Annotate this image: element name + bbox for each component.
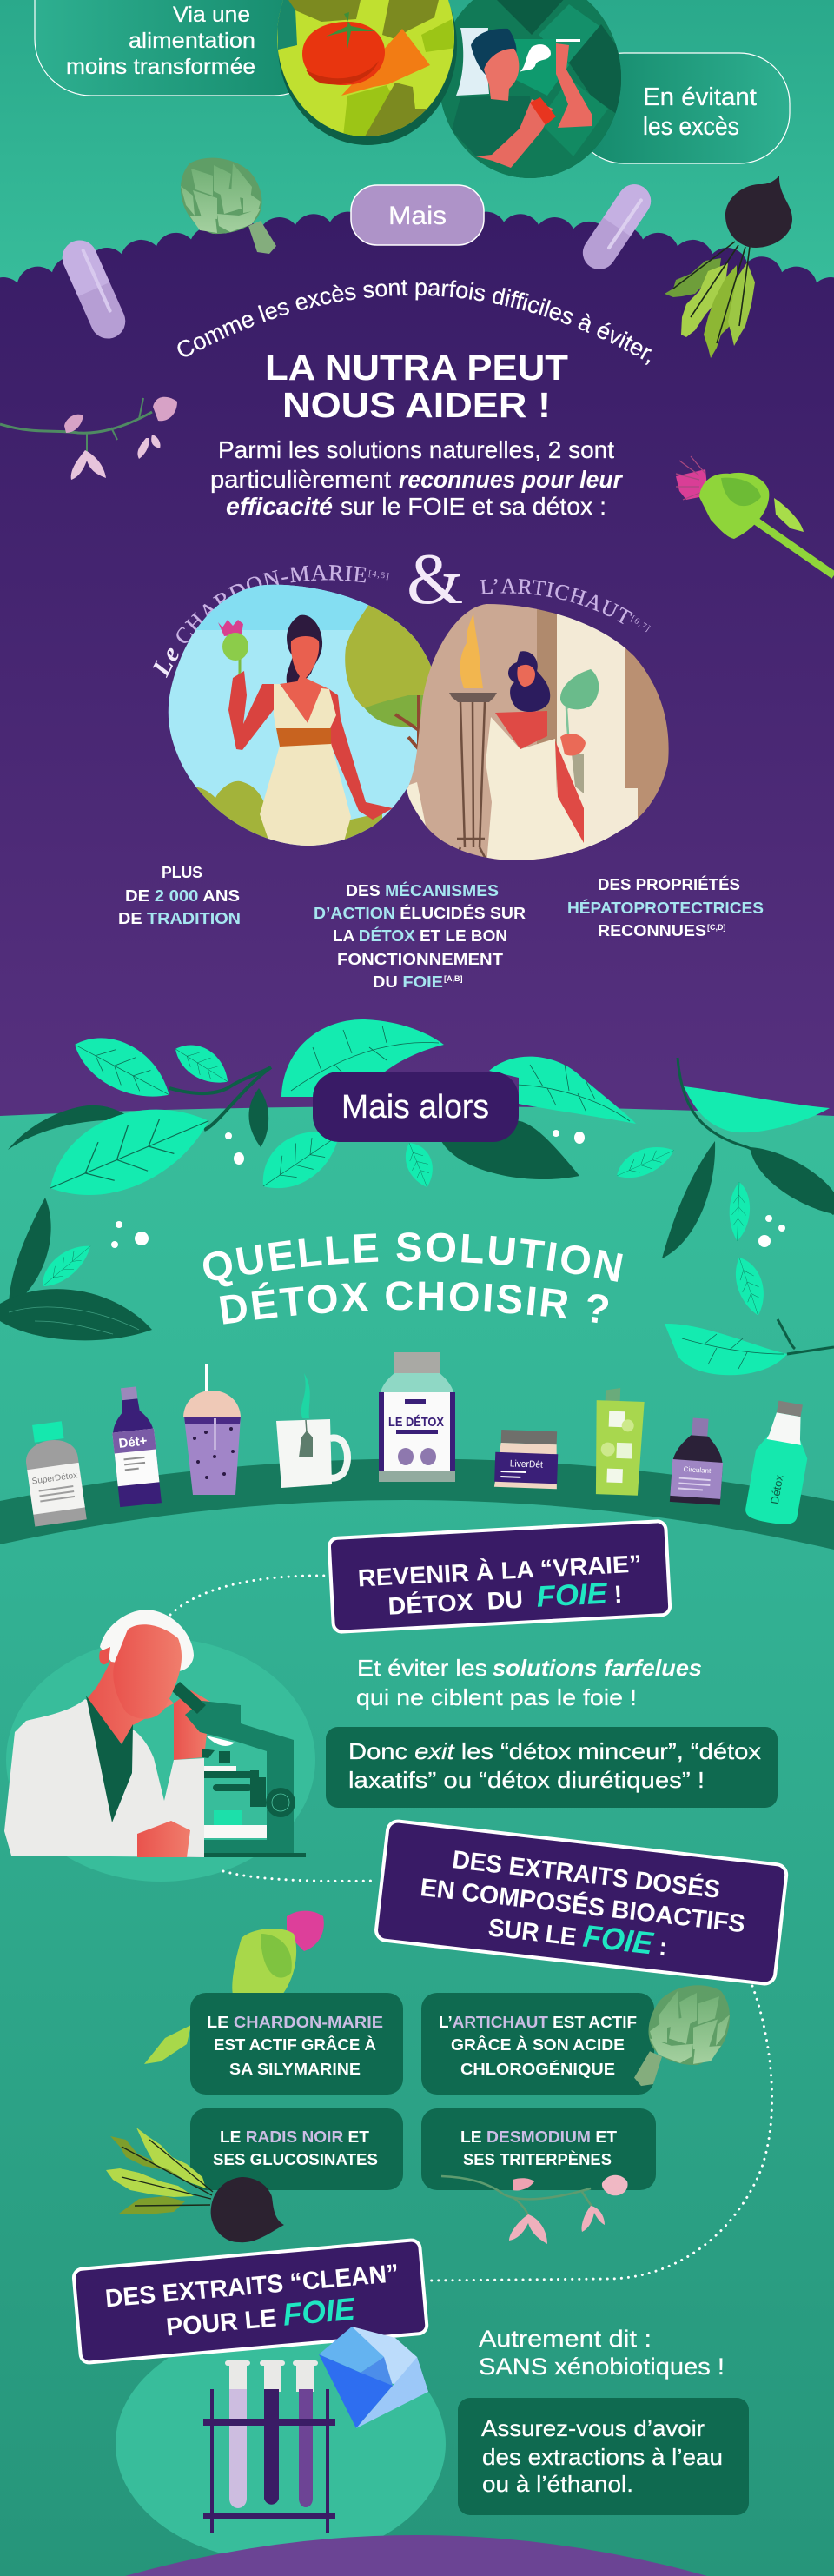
- person hair: [471, 29, 517, 76]
- col: tradition: PLUS: [162, 864, 202, 881]
- leaf vertical: [729, 1182, 751, 1241]
- tomato: [302, 22, 385, 85]
- product: dét+ bottle: [108, 1385, 162, 1507]
- icon: black radish top: [665, 176, 792, 358]
- text: extraits clean: DES EXTRAITS “CLEAN”: [104, 2260, 400, 2313]
- text: parmi les solutions: Parmi les solutions naturelles, 2 sont: [218, 436, 614, 463]
- heading: la nutra peut nous aider: LA NUTRA PEUT: [265, 348, 568, 388]
- text: éviter les solutions farfelues: [356, 1655, 702, 1710]
- icon: desmodium twig top: [0, 397, 177, 480]
- text: via une alimentation: moins transformée: [66, 55, 255, 79]
- pill: via une alimentation: [35, 0, 330, 96]
- face: [517, 665, 535, 687]
- person head: [484, 49, 519, 101]
- product: le détox bottle: LE DÉTOX: [388, 1415, 444, 1430]
- heading: quelle solution détox choisir: DÉTOX CHOISIR ?: [219, 1281, 608, 1325]
- text: chardon-marie: SA SILYMARINE: [229, 2061, 361, 2078]
- product: dét+ bottle: Dét+: [118, 1433, 149, 1451]
- leaf thin left: [9, 1198, 51, 1308]
- text: radis noir: SES GLUCOSINATES: [213, 2151, 378, 2168]
- illustration: scientist with microscope: [4, 1610, 306, 1857]
- leaf dark right: [750, 1147, 834, 1214]
- leaf top right: [684, 1086, 830, 1132]
- heading: quelle solution détox choisir: [203, 1232, 623, 1325]
- text: autrement dit: Autrement dit :: [479, 2326, 652, 2352]
- leaf bottom right: [665, 1324, 787, 1375]
- icon: artichoke top: [181, 158, 276, 254]
- hand: [137, 1821, 190, 1857]
- text: en évitant les excès: les excès: [643, 113, 739, 141]
- eyepiece: [171, 1682, 206, 1714]
- belt: [276, 728, 331, 747]
- box: artichaut: [421, 1993, 654, 2095]
- col: tradition: [118, 864, 241, 927]
- text: via une alimentation: [66, 3, 255, 79]
- text: extraits dosés: [415, 1841, 751, 1971]
- text: parmi les solutions: efficacité: [226, 493, 333, 520]
- text: revenir: [357, 1550, 644, 1623]
- tube 2: [260, 2360, 285, 2505]
- product: superdétox bottle: [21, 1419, 87, 1527]
- ampersand: &: [407, 539, 463, 620]
- col: mécanismes: [A,B]: [444, 974, 462, 983]
- leaf dark under pill: [441, 1121, 579, 1179]
- leaf lower centre: [249, 1114, 350, 1203]
- text: artichaut: GRÂCE À SON ACIDE: [451, 2035, 625, 2054]
- text: donc exit: laxatifs” ou “détox diurétiques” !: [348, 1767, 705, 1793]
- leaf dark left: [8, 1105, 136, 1150]
- sleeve left: [407, 782, 426, 826]
- leaf small centre: [400, 1138, 440, 1192]
- text: éviter les solutions farfelues: qui ne ciblent pas le foie !: [356, 1684, 637, 1710]
- pill: mais alors: [313, 1072, 519, 1142]
- tube 1: [225, 2360, 250, 2508]
- illustration: salad bowl: [276, 0, 459, 145]
- box: desmodium: [421, 2108, 656, 2190]
- heading: quelle solution détox choisir: QUELLE SOLUTION: [203, 1232, 623, 1286]
- leaf small right: [611, 1138, 678, 1185]
- leaf large centre: [281, 1019, 444, 1097]
- hair: [287, 615, 323, 683]
- product: mojito glass: [593, 1387, 645, 1496]
- hand: [560, 734, 586, 755]
- branch left: [169, 1067, 271, 1130]
- text: artichaut: [439, 2014, 637, 2078]
- shirt: [86, 1696, 133, 1822]
- illustration: man with torch: [404, 600, 673, 865]
- text: radis noir: [213, 2128, 378, 2168]
- leaf right big: [489, 1057, 636, 1124]
- text: artichaut: L’ARTICHAUT EST ACTIF: [439, 2014, 637, 2031]
- leaf dark thin: [248, 1088, 268, 1147]
- panel: donc exit: [326, 1727, 778, 1808]
- test tubes rack: [203, 2360, 335, 2533]
- panel: revenir à la vraie détox: [328, 1521, 671, 1632]
- text: desmodium: LE DESMODIUM ET: [460, 2128, 617, 2146]
- curved label: artichaut: L’ARTICHAUT: [480, 579, 632, 624]
- toga: [486, 717, 586, 865]
- torch: [449, 693, 497, 702]
- icon: black radish lower: [106, 2128, 284, 2242]
- leaf dark bottom left: [0, 1289, 152, 1340]
- lens: [206, 1736, 235, 1746]
- hair and beard: [508, 651, 550, 712]
- box: radis noir: [190, 2108, 403, 2190]
- col: mécanismes: DES MÉCANISMES: [346, 881, 499, 900]
- text: extraits clean: [104, 2260, 403, 2347]
- text: extraits dosés: DES EXTRAITS DOSÉS: [451, 1844, 722, 1904]
- neck: [87, 1643, 174, 1744]
- green section hill: [0, 1106, 834, 2576]
- branch right: [678, 1058, 834, 1214]
- text: mais: Mais: [388, 202, 447, 230]
- col: tradition: DE 2 000 ANS: [125, 887, 240, 905]
- twig right: [778, 1319, 834, 1354]
- icon: milk thistle lower: [144, 1911, 324, 2064]
- dotted line: to extraits dosés: [223, 1871, 375, 1881]
- red sash: [555, 740, 584, 843]
- curved label: chardon-marie: [4,5]: [368, 570, 389, 581]
- text: mais alors: Mais alors: [341, 1089, 489, 1125]
- text: donc exit: [348, 1738, 761, 1793]
- tube 3: [293, 2360, 318, 2507]
- curved label: artichaut: [6,7]: [631, 615, 651, 633]
- column base: [586, 788, 638, 848]
- tree: [345, 605, 431, 713]
- leaf: [565, 707, 570, 734]
- curved label: chardon-marie: Le CHARDON-MARIE: [153, 565, 367, 678]
- text: parmi les solutions: [210, 436, 624, 520]
- purple wavy section: [0, 209, 834, 1130]
- text: parmi les solutions: sur le FOIE et sa détox :: [341, 493, 606, 520]
- test tube background circle: [116, 2327, 446, 2561]
- red torso: [495, 711, 547, 749]
- carrot: [341, 29, 430, 96]
- product: green bottle: [744, 1398, 817, 1527]
- text: en évitant les excès: En évitant: [643, 83, 757, 111]
- scientist background circle: [6, 1638, 315, 1882]
- product: liverdét jar: LiverDét: [510, 1458, 543, 1471]
- text: extractions: Assurez-vous d’avoir: [481, 2415, 705, 2441]
- text: chardon-marie: LE CHARDON-MARIE: [207, 2014, 383, 2031]
- text: radis noir: LE RADIS NOIR ET: [220, 2128, 369, 2146]
- col: mécanismes: D’ACTION ÉLUCIDÉS SUR: [314, 904, 526, 922]
- col: propriétés: [567, 875, 764, 939]
- product: le détox bottle: [379, 1352, 455, 1482]
- arm up: [174, 1690, 210, 1760]
- arm down: [329, 689, 393, 820]
- pill: mais: [351, 185, 484, 245]
- panel: extraits dosés: [375, 1820, 787, 1985]
- leaf large lower left: [35, 1084, 221, 1217]
- panel: extraits clean: [73, 2240, 427, 2363]
- microscope body: [185, 1701, 294, 1853]
- shelf band: [0, 1458, 834, 1550]
- pill: en évitant les excès: [573, 53, 790, 163]
- icon: blue gem: [319, 2327, 428, 2428]
- col: propriétés: RECONNUES: [598, 922, 706, 939]
- text: extraits dosés: EN COMPOSÉS BIOACTIFS: [419, 1872, 746, 1938]
- face and chest: [280, 636, 329, 723]
- person arm up: [556, 43, 592, 128]
- icon: artichoke lower: [634, 1985, 730, 2086]
- product: smoothie cup: [183, 1364, 241, 1495]
- text: parmi les solutions: particulièrement: [210, 466, 391, 493]
- col: propriétés: [C,D]: [707, 923, 726, 932]
- text: artichaut: CHLOROGÉNIQUE: [460, 2060, 615, 2078]
- curved intro text: Comme les excès sont parfois difficiles à éviter,: [177, 280, 652, 365]
- col: propriétés: HÉPATOPROTECTRICES: [567, 899, 764, 917]
- product: liverdét jar: [494, 1430, 559, 1489]
- sleeve: [572, 754, 584, 793]
- box: chardon-marie: [190, 1993, 403, 2095]
- text: extractions: ou à l’éthanol.: [482, 2471, 633, 2497]
- col: tradition: DE TRADITION: [118, 910, 241, 927]
- leaf lower right: [729, 1253, 771, 1318]
- text: donc exit: Donc exit les “détox minceur”, “détox: [348, 1738, 761, 1764]
- dotted line: head to revenir: [170, 1576, 327, 1615]
- text: via une alimentation: alimentation: [129, 29, 255, 53]
- coat: [4, 1699, 204, 1857]
- person arm down: [476, 99, 553, 168]
- decorative leaves: [0, 1019, 834, 1375]
- arm raised: [228, 671, 278, 750]
- illustration: smoking and drinking person: [439, 0, 621, 183]
- text: chardon-marie: EST ACTIF GRÂCE À: [214, 2035, 376, 2054]
- col: propriétés: DES PROPRIÉTÉS: [598, 875, 740, 893]
- product: dark bottle: Circulant: [683, 1465, 712, 1475]
- text: extraits dosés: SUR LE FOIE :: [486, 1907, 670, 1962]
- heading: la nutra peut nous aider: [265, 348, 568, 425]
- product: tea mug: [276, 1373, 348, 1488]
- icon: capsule left: [56, 235, 131, 344]
- dotted line: to extraits clean: [428, 1986, 772, 2281]
- text: parmi les solutions: reconnues pour leur: [399, 466, 624, 493]
- cup: [530, 97, 556, 125]
- leaf 2: [169, 1035, 236, 1092]
- text: autrement dit: [479, 2326, 725, 2380]
- head: [113, 1624, 182, 1719]
- text: extraits clean: POUR LE FOIE: [164, 2291, 357, 2342]
- product: green bottle: Détox: [768, 1473, 786, 1505]
- purple dome bottom: [125, 2535, 707, 2576]
- bushes: [196, 780, 268, 839]
- text: éviter les solutions farfelues: Et éviter les: [357, 1655, 487, 1681]
- icon: milk thistle right: [676, 456, 834, 575]
- product: dark bottle: [670, 1417, 726, 1505]
- smoke: [520, 44, 551, 72]
- text: via une alimentation: Via une: [173, 3, 250, 27]
- icon: desmodium twig lower: [441, 2175, 628, 2244]
- col: mécanismes: FONCTIONNEMENT: [337, 951, 503, 968]
- col: mécanismes: LA DÉTOX ET LE BON: [333, 926, 507, 945]
- leaf dark thin right: [662, 1141, 715, 1258]
- icon: capsule right: [576, 178, 658, 276]
- text: autrement dit: SANS xénobiotiques !: [479, 2354, 725, 2380]
- col: mécanismes: [314, 881, 526, 991]
- text: en évitant les excès: [643, 83, 757, 141]
- heading: la nutra peut nous aider: NOUS AIDER !: [282, 385, 551, 425]
- text: éviter les solutions farfelues: solutions farfelues: [493, 1655, 702, 1681]
- flame: [460, 613, 483, 688]
- text: chardon-marie: [207, 2014, 383, 2078]
- text: desmodium: SES TRITERPÈNES: [463, 2150, 612, 2168]
- leaf 1: [65, 1022, 181, 1112]
- thistle: [238, 659, 242, 674]
- white curtain: [456, 28, 489, 96]
- text: desmodium: [460, 2128, 617, 2168]
- col: mécanismes: DU FOIE: [373, 973, 443, 991]
- product: superdétox bottle: SuperDétox: [31, 1471, 78, 1487]
- text: revenir: REVENIR À LA “VRAIE”: [357, 1550, 642, 1592]
- hair: [100, 1610, 194, 1671]
- products: [21, 1352, 817, 1527]
- text: extractions: des extractions à l’eau: [482, 2444, 723, 2470]
- background: top teal band: [0, 0, 834, 295]
- box: extractions: [458, 2398, 749, 2515]
- leaf small left: [35, 1237, 96, 1294]
- text: extractions: [481, 2415, 723, 2497]
- text: revenir: DÉTOX DU FOIE !: [387, 1577, 623, 1622]
- illustration: woman with thistle: [169, 584, 431, 846]
- stage: [204, 1766, 236, 1771]
- dress: [274, 684, 336, 730]
- white dots: [111, 1130, 785, 1248]
